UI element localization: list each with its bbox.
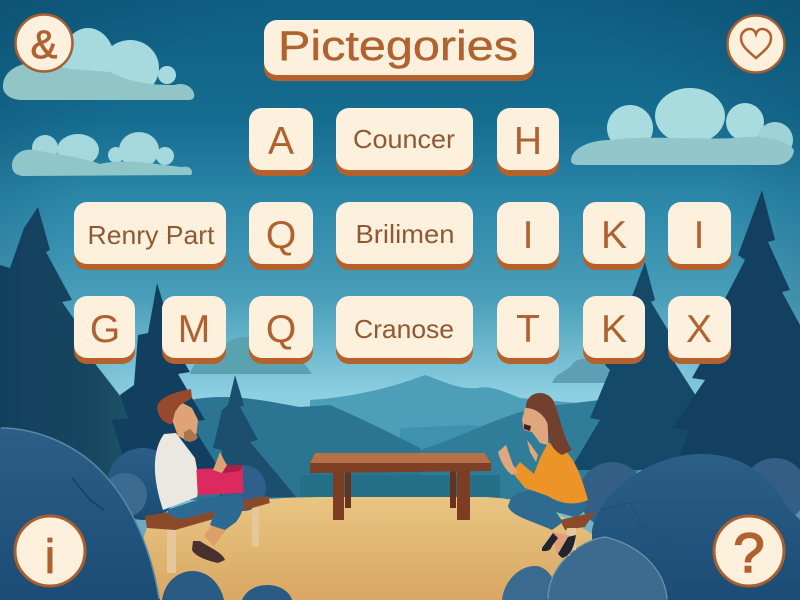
icon: info button: i xyxy=(45,531,55,584)
tile: Renry Part xyxy=(74,202,226,270)
tile: Councer xyxy=(336,108,473,176)
man xyxy=(155,389,244,563)
tile: Cranose xyxy=(336,296,473,364)
bench xyxy=(145,496,270,573)
tile: Cranose: Cranose xyxy=(354,314,454,344)
tile: K xyxy=(583,202,645,270)
pine trees right xyxy=(570,190,800,500)
boulder: left xyxy=(0,428,160,600)
cloud: upper right xyxy=(571,88,794,165)
title tile: Pictegories xyxy=(278,22,518,69)
icon: help button xyxy=(714,516,784,586)
row 2 tiles xyxy=(74,202,731,270)
tile: Brilimen: Brilimen xyxy=(356,219,454,249)
tile: T xyxy=(497,296,559,364)
icon: info button xyxy=(15,516,85,586)
tile: Renry Part: Renry Part xyxy=(88,220,215,250)
table xyxy=(310,453,491,520)
tile: K xyxy=(583,296,645,364)
tile: M xyxy=(162,296,226,364)
tile: G xyxy=(74,296,135,364)
tile: I: I xyxy=(523,214,533,257)
tile: Q xyxy=(249,202,313,270)
title tile xyxy=(264,20,534,81)
cloud: upper left xyxy=(3,28,194,100)
mountains xyxy=(190,375,640,500)
pine trees left xyxy=(0,207,296,500)
boulder: right xyxy=(548,454,800,600)
icon: ampersand button xyxy=(16,14,72,72)
tile: A xyxy=(249,108,313,176)
tile: H xyxy=(497,108,559,176)
tile: X: X xyxy=(686,308,712,351)
tile: I second xyxy=(668,202,731,270)
tile: G: G xyxy=(90,308,120,351)
row 3 tiles xyxy=(74,296,731,364)
tile: Brilimen xyxy=(336,202,473,270)
small boulders xyxy=(103,448,800,600)
tile: K: K xyxy=(601,308,627,351)
tile: A: A xyxy=(268,120,294,163)
sandy ground xyxy=(120,497,600,600)
tile: Q: Q xyxy=(266,214,296,257)
tile: I second: I xyxy=(694,214,704,257)
row 1 tiles xyxy=(249,108,559,176)
tile: H: H xyxy=(514,120,542,163)
tile: K: K xyxy=(601,214,627,257)
icon: heart button xyxy=(728,16,784,72)
icon: ampersand button: & xyxy=(31,23,58,67)
faint distant clouds xyxy=(190,337,612,383)
tile: M: M xyxy=(178,308,210,351)
cloud: middle left xyxy=(12,132,192,176)
tile: X xyxy=(668,296,731,364)
tile: Q: Q xyxy=(266,308,296,351)
tile: T: T xyxy=(516,308,540,351)
woman xyxy=(498,393,595,558)
tile: I xyxy=(497,202,559,270)
tile: Councer: Councer xyxy=(353,124,455,154)
icon: help button: ? xyxy=(733,521,765,584)
tile: Q xyxy=(249,296,313,364)
